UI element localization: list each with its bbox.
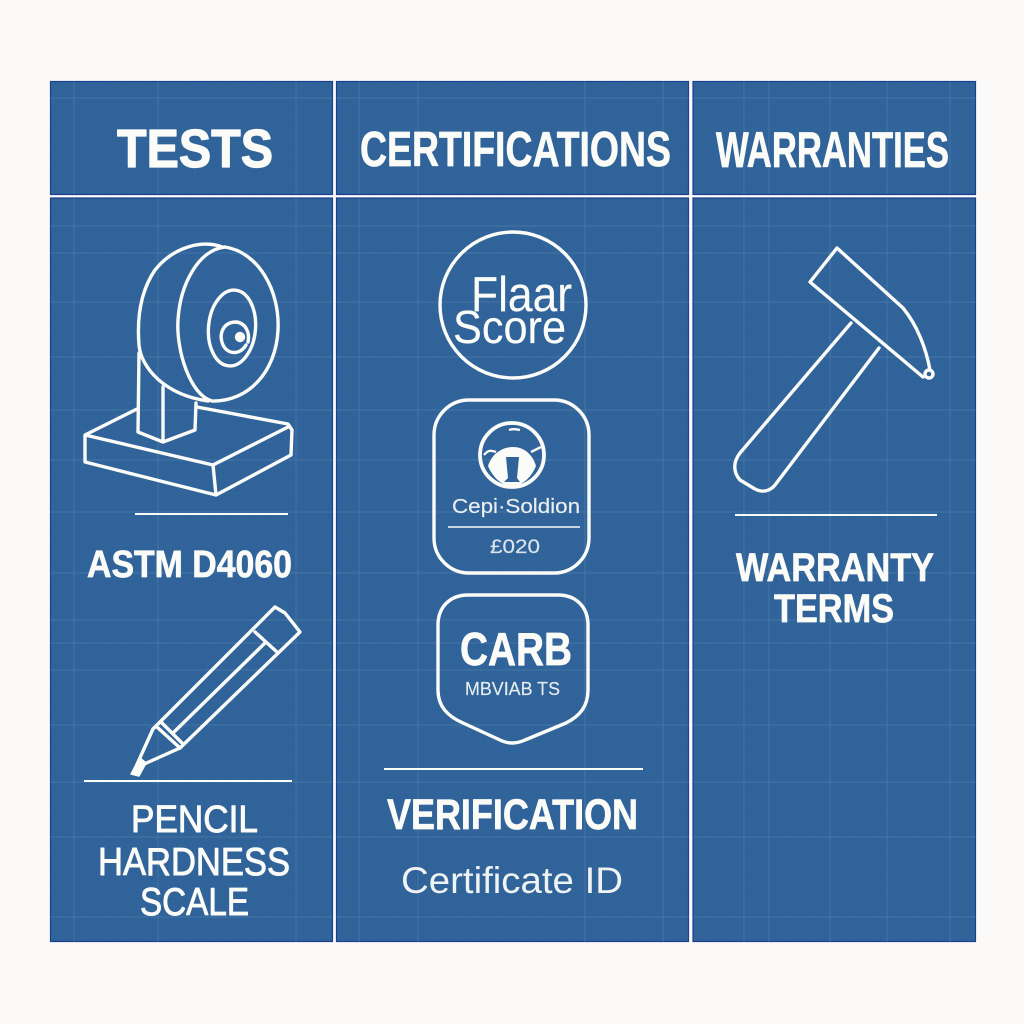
badge: CARB shield: MBVIAB TS: [465, 679, 560, 699]
badge: Flaar Score: Score: [453, 301, 566, 353]
label: verification: VERIFICATION: [387, 791, 638, 839]
label: pencil hardness scale: PENCIL: [131, 799, 258, 841]
badge: CARB shield: [438, 595, 588, 743]
label: warranty terms: TERMS: [774, 587, 894, 631]
label: ASTM D4060: ASTM D4060: [87, 544, 292, 586]
label: certificate ID: Certificate ID: [401, 860, 623, 901]
label: warranty terms: [736, 546, 934, 631]
icon: bear face: [480, 423, 544, 487]
divider: certifications rule: [384, 768, 643, 770]
label: warranty terms: WARRANTY: [736, 546, 934, 590]
heading: certifications: CERTIFICATIONS: [360, 123, 671, 177]
badge: CARB shield: CARB: [460, 623, 572, 675]
panel: table background: [50, 82, 976, 942]
label: pencil hardness scale: SCALE: [140, 881, 249, 924]
label: pencil hardness scale: [98, 799, 290, 924]
divider: tests second rule: [84, 780, 292, 782]
badge: certification seal: Cepi·Soldion: [452, 496, 580, 518]
icon: abrasion test roller: [85, 244, 292, 495]
icon: hammer: [735, 248, 933, 491]
badge: Flaar Score: Flaar: [471, 268, 572, 322]
heading: tests: TESTS: [117, 119, 273, 179]
badge: certification seal: £020: [490, 537, 540, 558]
badge: Flaar Score: [440, 232, 586, 378]
icon: pencil: [131, 607, 300, 776]
label: pencil hardness scale: HARDNESS: [98, 841, 290, 884]
divider: tests first rule: [135, 513, 288, 515]
badge: certification seal: [434, 400, 589, 573]
divider: warranties rule: [735, 514, 937, 516]
